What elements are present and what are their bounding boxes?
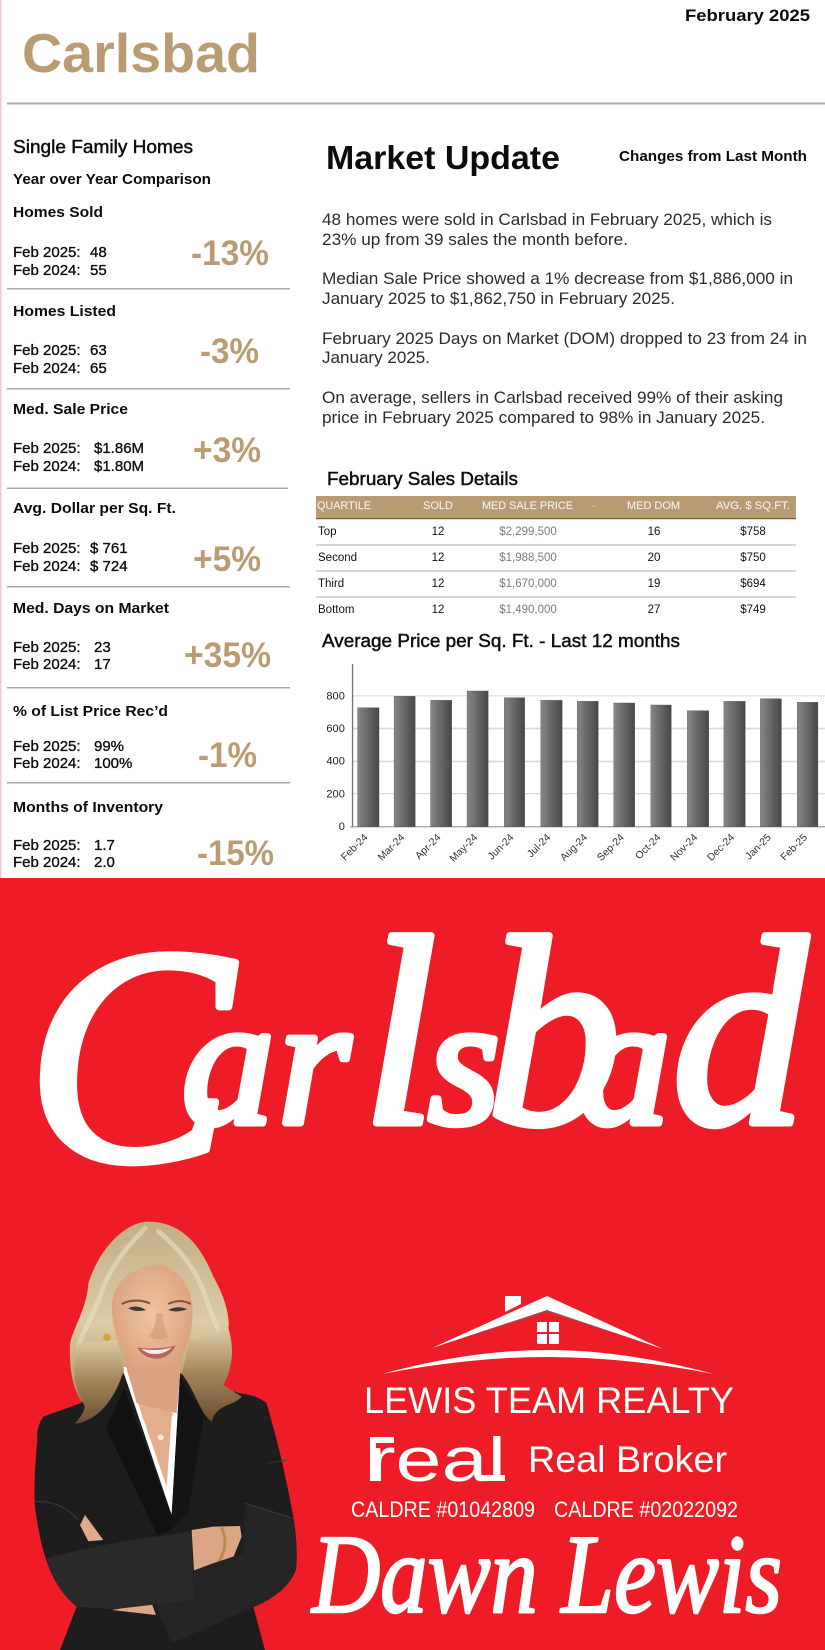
script title: Carlsbad: C <box>26 885 239 1228</box>
chart bars <box>358 691 818 827</box>
metric: median days on market: Feb 2024: <box>13 656 81 673</box>
script title: Carlsbad: r <box>278 959 351 1164</box>
table row: bottom <box>318 604 766 616</box>
table row: second: 12 <box>432 552 444 564</box>
brokerage name: Real Broker <box>528 1439 727 1480</box>
chart y axis labels: 200 <box>326 788 345 800</box>
metric: average dollar per square foot: Avg. Dollar per Sq. Ft. <box>13 500 176 517</box>
metric: median days on market: +35% <box>184 636 271 675</box>
metric: average dollar per square foot <box>13 500 261 579</box>
paragraph: median sale price: January 2025 to $1,862,750 in February 2025. <box>322 290 675 308</box>
license numbers: CALDRE #02022092 <box>554 1497 738 1522</box>
metric: median sale price: Med. Sale Price <box>13 401 128 418</box>
metric: median days on market <box>13 600 271 675</box>
license numbers: CALDRE #01042809 <box>351 1497 535 1522</box>
company name: LEWIS TEAM REALTY <box>364 1380 734 1421</box>
table row: third: 19 <box>648 578 660 590</box>
script title: Carlsbad: s <box>428 959 500 1164</box>
portrait: realtor with crossed arms <box>35 1222 297 1650</box>
heading: market update: Market Update <box>326 139 560 176</box>
metric: homes sold: Feb 2025: <box>13 244 81 261</box>
metric: months of inventory: Months of Inventory <box>13 799 164 816</box>
metric: homes sold: 48 <box>90 244 107 261</box>
chart x axis labels: Aug-24 <box>559 832 590 864</box>
metric: average dollar per square foot: $ 724 <box>90 558 128 575</box>
chart x axis labels: Mar-24 <box>376 832 407 863</box>
title: Carlsbad: Carlsbad <box>22 22 260 84</box>
table row: second: $750 <box>740 552 766 564</box>
chart x axis labels: Sep-24 <box>595 832 627 864</box>
metric: median days on market: Feb 2025: <box>13 639 81 656</box>
chart x axis labels: Nov-24 <box>669 832 700 864</box>
metric: percent of list price received: % of List Price Rec’d <box>13 703 168 720</box>
brokerage logo: real: real <box>368 1426 506 1495</box>
table header row: SOLD <box>423 500 453 512</box>
table row: third: $694 <box>740 578 766 590</box>
metric: percent of list price received <box>13 703 257 775</box>
metric: percent of list price received: Feb 2024: <box>13 755 81 772</box>
paragraph: homes sold: 23% up from 39 sales the month before. <box>322 231 628 249</box>
metric: homes sold: 55 <box>90 262 107 279</box>
metric: average dollar per square foot: Feb 2024: <box>13 558 81 575</box>
chart x axis labels: May-24 <box>448 832 480 864</box>
portrait arms and hands <box>80 1515 103 1541</box>
script title: Carlsbad: a <box>578 959 670 1164</box>
chart y axis labels: 400 <box>326 756 345 768</box>
table row: bottom: Bottom <box>318 604 354 616</box>
table row: top: 16 <box>648 526 660 538</box>
chart x axis labels: Feb-25 <box>779 832 810 863</box>
metric: homes listed: -3% <box>200 332 259 371</box>
metric: months of inventory: 2.0 <box>94 854 115 871</box>
chart x axis labels <box>339 832 810 864</box>
note: changes from last month: Changes from Last Month <box>619 148 807 165</box>
table row: top <box>318 526 766 538</box>
table header row: QUARTILE <box>317 500 371 512</box>
table row: bottom: 27 <box>648 604 660 616</box>
bar chart: average price per square foot, last 12 months <box>326 664 825 864</box>
table row: second: Second <box>318 552 357 564</box>
table row: bottom: $749 <box>740 604 766 616</box>
chart y axis labels: 600 <box>326 723 345 735</box>
metric: median sale price: $1.80M <box>94 458 144 475</box>
table row: bottom: 12 <box>432 604 444 616</box>
chart y axis labels: 800 <box>326 690 345 702</box>
metric: homes sold: Feb 2024: <box>13 262 81 279</box>
table row: top: $2,299,500 <box>499 526 557 538</box>
table row: third: $1,670,000 <box>499 578 557 590</box>
metric: months of inventory: -15% <box>197 834 274 873</box>
metric: months of inventory: Feb 2024: <box>13 854 81 871</box>
header: city title and date <box>22 6 810 84</box>
paragraph: homes sold: 48 homes were sold in Carlsbad in February 2025, which is <box>322 211 772 229</box>
table header row: - <box>592 500 596 512</box>
metric: average dollar per square foot: Feb 2025: <box>13 540 81 557</box>
heading: february sales details: February Sales Details <box>327 469 518 489</box>
table header row: MED SALE PRICE <box>482 500 573 512</box>
table row: top: $758 <box>740 526 766 538</box>
table row: top: Top <box>318 526 337 538</box>
chart x axis labels: Apr-24 <box>414 832 444 862</box>
table row: second <box>318 552 766 564</box>
table header row: AVG. $ SQ.FT. <box>716 500 790 512</box>
script title: Carlsbad: l <box>362 883 437 1182</box>
portrait face <box>112 1265 193 1375</box>
metric: percent of list price received: -1% <box>198 736 257 775</box>
metric: months of inventory <box>13 799 274 873</box>
metric: homes listed: 63 <box>90 342 107 359</box>
chart y axis labels <box>326 690 345 833</box>
chart y axis labels: 0 <box>339 821 345 833</box>
metric: median days on market: 23 <box>94 639 111 656</box>
paragraph: median sale price: Median Sale Price showed a 1% decrease from $1,886,000 in <box>322 270 793 288</box>
chart x axis labels: Feb-24 <box>339 832 371 863</box>
table row: bottom: $1,490,000 <box>499 604 557 616</box>
subheading: year over year: Year over Year Comparison <box>13 171 211 188</box>
portrait front hair locks <box>74 1328 242 1424</box>
metric: average dollar per square foot: +5% <box>193 540 261 579</box>
date: February 2025 <box>685 6 810 25</box>
metric: homes sold: Homes Sold <box>13 204 103 221</box>
metric: homes listed: 65 <box>90 360 107 377</box>
table row: second: 20 <box>648 552 660 564</box>
metric: median sale price: $1.86M <box>94 440 144 457</box>
metric: homes listed: Feb 2025: <box>13 342 81 359</box>
paragraph: days on market: January 2025. <box>322 349 430 367</box>
paragraph: median sale price <box>322 270 793 308</box>
metric: homes listed: Feb 2024: <box>13 360 81 377</box>
metric: months of inventory: Feb 2025: <box>13 837 81 854</box>
metric: homes listed <box>13 303 259 377</box>
metric: median sale price: +3% <box>193 431 261 470</box>
heading: average price per square foot: Average Price per Sq. Ft. - Last 12 months <box>322 630 680 651</box>
script title: Carlsbad: a <box>182 959 274 1164</box>
table header row <box>316 496 796 519</box>
table row: third: 12 <box>432 578 444 590</box>
panel: year over year comparison <box>7 137 290 873</box>
metric: median sale price: Feb 2024: <box>13 458 81 475</box>
paragraph: homes sold <box>322 211 772 249</box>
metric: average dollar per square foot: $ 761 <box>90 540 128 557</box>
paragraph: asking price: price in February 2025 compared to 98% in January 2025. <box>322 409 765 427</box>
license numbers <box>351 1497 738 1522</box>
chart x axis labels: Dec-24 <box>706 832 737 864</box>
metric: homes listed: Homes Listed <box>13 303 116 320</box>
metric: homes sold: -13% <box>191 234 269 273</box>
table row: top: 12 <box>432 526 444 538</box>
metric: median sale price <box>13 401 261 475</box>
metric: months of inventory: 1.7 <box>94 837 115 854</box>
chart x axis labels: Jul-24 <box>525 832 553 860</box>
panel: february sales details table <box>316 469 796 616</box>
paragraph: days on market <box>322 330 807 367</box>
table row: second: $1,988,500 <box>499 552 557 564</box>
script title: Carlsbad: b <box>486 883 621 1182</box>
heading: single family homes: Single Family Homes <box>13 137 193 157</box>
script title: Carlsbad: d <box>672 883 811 1182</box>
paragraph: asking price: On average, sellers in Carlsbad received 99% of their asking <box>322 389 783 407</box>
metric: percent of list price received: 99% <box>94 738 124 755</box>
table row: third <box>318 578 766 590</box>
chart x axis labels: Oct-24 <box>634 832 664 862</box>
chart x axis labels: Jun-24 <box>486 832 517 862</box>
table header row: MED DOM <box>627 500 680 512</box>
metric: median days on market: Med. Days on Market <box>13 600 169 617</box>
logo: house roof <box>382 1296 714 1374</box>
metric: homes sold <box>13 204 269 279</box>
panel: red footer background <box>0 878 825 1650</box>
metric: median sale price: Feb 2025: <box>13 440 81 457</box>
metric: percent of list price received: Feb 2025: <box>13 738 81 755</box>
metric: median days on market: 17 <box>94 656 111 673</box>
paragraph: asking price <box>322 389 783 427</box>
table row: third: Third <box>318 578 344 590</box>
chart x axis labels: Jan-25 <box>744 832 774 862</box>
portrait jacket <box>35 1373 297 1650</box>
panel: market update text <box>322 139 807 427</box>
paragraph: days on market: February 2025 Days on Market (DOM) dropped to 23 from 24 in <box>322 330 807 348</box>
metric: percent of list price received: 100% <box>94 755 132 772</box>
